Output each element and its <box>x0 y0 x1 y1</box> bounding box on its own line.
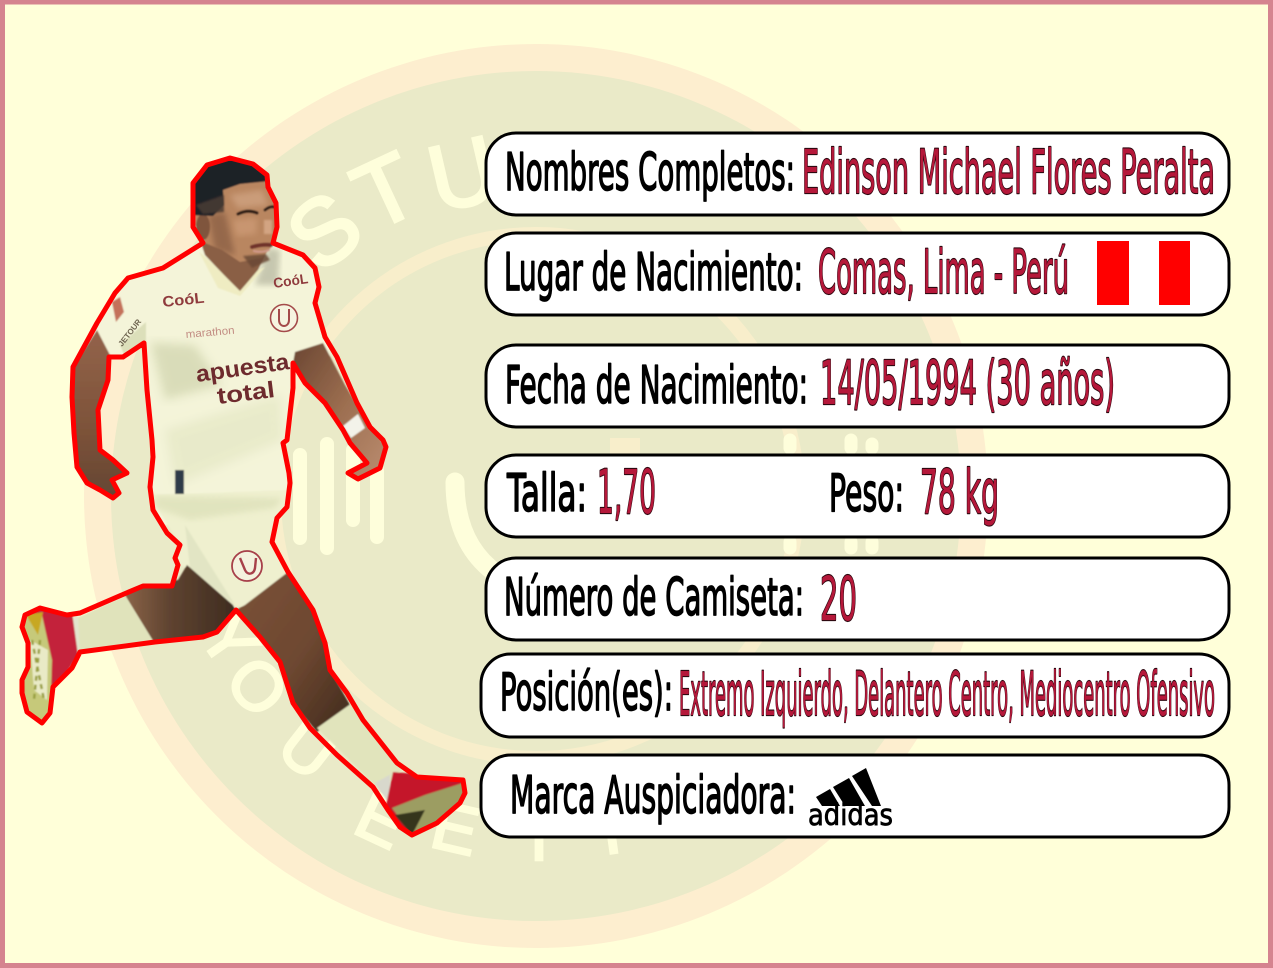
front sock <box>317 703 402 790</box>
club crest on jersey <box>270 304 298 332</box>
ear <box>196 214 210 240</box>
jersey sponsor: apuesta total: apuesta <box>194 348 291 387</box>
row: posiciones: Posición(es): <box>500 663 673 723</box>
watermark logo: U <box>264 705 350 795</box>
watermark logo: O <box>211 642 303 732</box>
face <box>196 180 274 262</box>
row: número de camiseta <box>486 558 1229 640</box>
jersey sponsor: marathon: marathon <box>185 325 235 341</box>
left arm <box>74 330 123 495</box>
row: fecha de nacimiento: Fecha de Nacimiento: <box>505 356 808 416</box>
icon: adidas logo: adidas <box>808 798 893 832</box>
red outline <box>22 158 465 835</box>
sleeve badge <box>112 297 124 322</box>
watermark logo: E <box>425 786 486 871</box>
player cutout with red outline <box>20 155 468 838</box>
right arm <box>293 343 386 479</box>
watermark logo: E <box>344 776 417 864</box>
row: talla y peso: Peso: <box>829 464 904 524</box>
icon: adidas logo <box>808 768 893 832</box>
jersey sponsor: Coól left: CoóL <box>162 290 205 311</box>
row: talla y peso: 78 kg <box>920 457 999 528</box>
icon: flag of Peru <box>1097 241 1190 305</box>
row: talla y peso <box>486 455 1229 537</box>
row: nombres completos: Nombres Completos: <box>505 143 795 203</box>
watermark logo: T <box>518 799 560 875</box>
hair <box>196 161 265 217</box>
front boot <box>385 772 468 838</box>
watermark logo: T <box>585 790 637 871</box>
row: fecha de nacimiento <box>486 345 1229 427</box>
row: número de camiseta: Número de Camiseta: <box>504 568 804 628</box>
jersey sponsor: apuesta total: total <box>215 376 276 409</box>
jersey sponsor: apuesta total <box>194 348 291 409</box>
jersey sponsor: Coól right: CoóL <box>272 270 310 291</box>
row: lugar de nacimiento: Lugar de Nacimiento: <box>504 243 803 303</box>
watermark logo: U <box>418 116 507 232</box>
jersey collar <box>199 252 265 296</box>
back boot <box>24 610 78 720</box>
watermark logo: T <box>338 132 433 250</box>
back leg <box>125 565 236 644</box>
watermark logo <box>84 44 988 948</box>
row: número de camiseta: 20 <box>820 564 857 635</box>
facial features <box>238 207 274 252</box>
jersey <box>70 235 330 525</box>
wristband <box>343 414 365 438</box>
front thigh <box>236 572 350 732</box>
row: lugar de nacimiento <box>486 233 1229 315</box>
neck <box>202 241 265 292</box>
row: marca auspiciadora: Marca Auspiciadora: <box>510 766 796 826</box>
row: talla y peso: 1,70 <box>597 457 656 528</box>
row: nombres completos <box>486 133 1229 215</box>
shorts <box>150 490 290 606</box>
watermark logo: S <box>268 171 381 291</box>
watermark logo: Y <box>185 600 273 681</box>
jersey tag <box>175 470 184 494</box>
row: posiciones <box>481 654 1229 737</box>
row: talla y peso: Talla: <box>506 464 587 524</box>
row: marca auspiciadora <box>481 755 1229 837</box>
sleeve sponsor: Jetour: JETOUR <box>116 317 143 348</box>
club crest on shorts <box>232 551 262 581</box>
back sock <box>78 596 154 650</box>
